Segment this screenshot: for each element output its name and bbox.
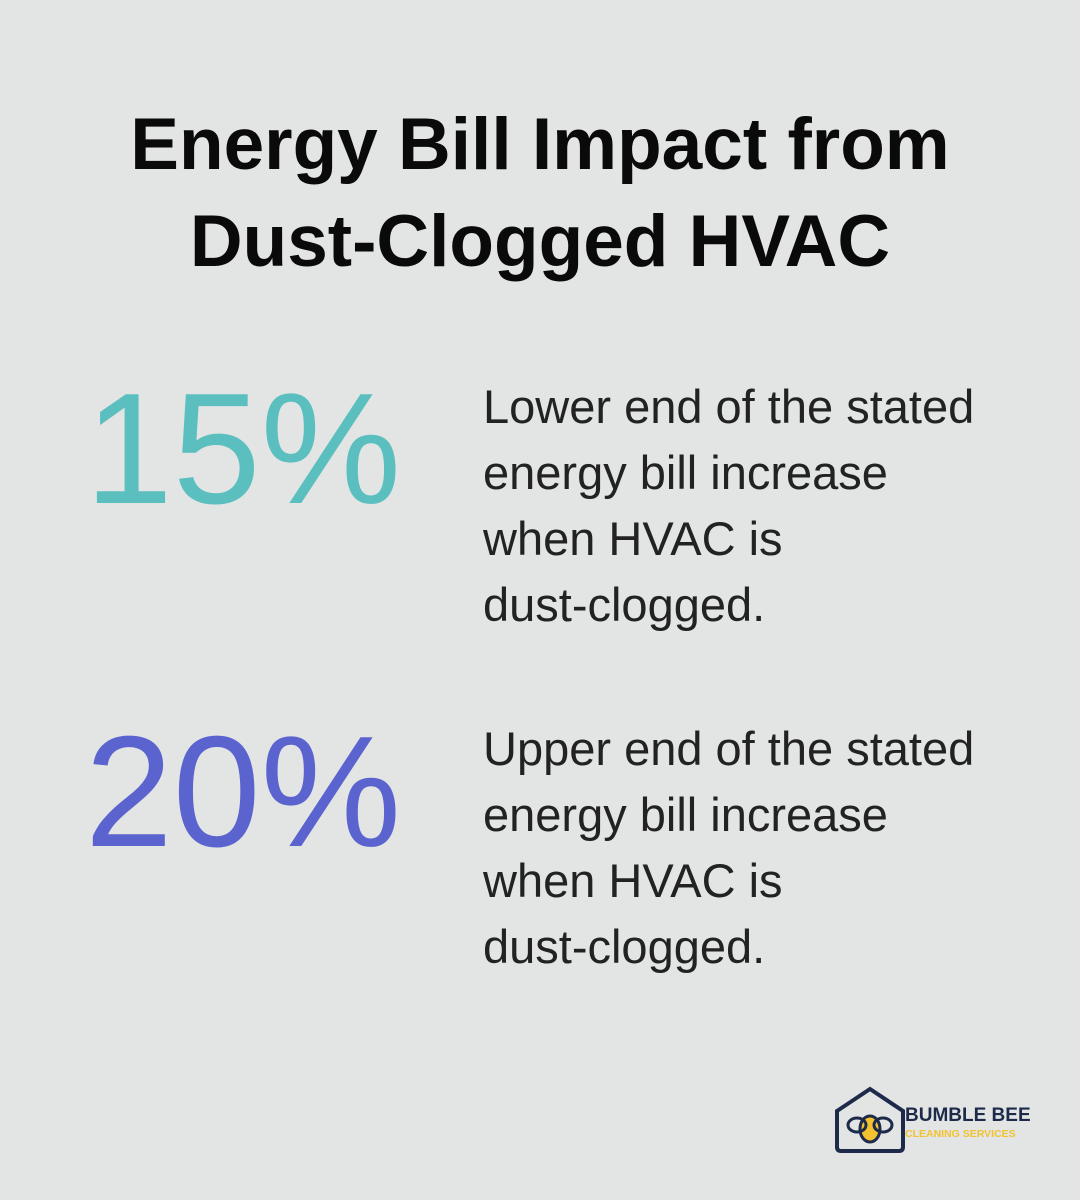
- title: [130, 104, 950, 282]
- logo: BUMBLE BEE: [905, 1105, 1031, 1126]
- description: 20%: [483, 722, 974, 973]
- description: 15%: dust-clogged.: [483, 578, 765, 631]
- description: 15%: [483, 380, 974, 631]
- description: 20%: energy bill increase: [483, 788, 888, 841]
- description: 15%: when HVAC is: [483, 512, 783, 565]
- stat: 15%: 15%: [85, 361, 401, 537]
- description: 15%: Lower end of the stated: [483, 380, 974, 433]
- title: Dust-Clogged HVAC: [190, 201, 890, 282]
- title: Energy Bill Impact from: [130, 104, 950, 185]
- description: 20%: Upper end of the stated: [483, 722, 974, 775]
- description: 15%: energy bill increase: [483, 446, 888, 499]
- logo: [835, 1086, 1031, 1153]
- description: 20%: dust-clogged.: [483, 920, 765, 973]
- logo: CLEANING SERVICES: [905, 1128, 1016, 1140]
- stat: 20%: 20%: [85, 704, 401, 880]
- description: 20%: when HVAC is: [483, 854, 783, 907]
